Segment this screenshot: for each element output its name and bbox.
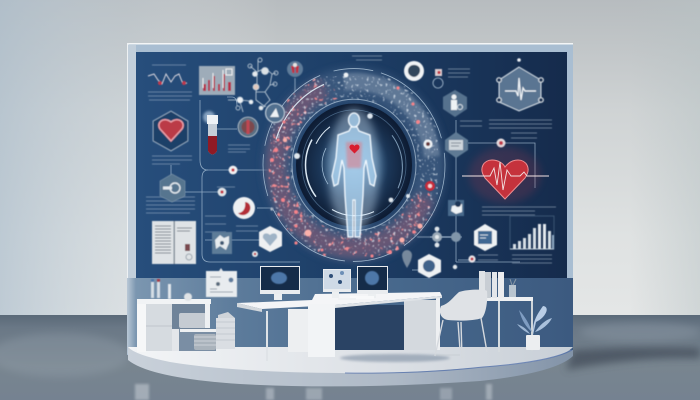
icon: heart shield bbox=[259, 226, 282, 252]
left storage cabinet bbox=[137, 299, 235, 352]
icon: blood test tube bbox=[203, 111, 218, 154]
icon: tool badge on ring bbox=[266, 104, 284, 122]
icon: specimen circle bbox=[238, 117, 258, 137]
connector lines bbox=[171, 97, 535, 270]
background wall bbox=[0, 0, 700, 316]
icon: small red node with ring bbox=[433, 69, 443, 88]
icon: heart hexagon bbox=[153, 111, 188, 151]
polished floor bbox=[0, 315, 700, 400]
display wall frame bbox=[127, 43, 573, 355]
icon: kidney badge bbox=[233, 197, 255, 219]
icon: heartbeat hexagon bbox=[497, 58, 543, 111]
circular platform bbox=[128, 347, 573, 386]
icon: red connector dots left bbox=[218, 166, 274, 257]
central ring: white nodes bbox=[294, 73, 435, 202]
floor reflection strips bbox=[135, 384, 492, 400]
potted plant bbox=[517, 306, 552, 350]
icon: report hexagon bbox=[474, 224, 497, 251]
icon: bar chart card bbox=[199, 66, 235, 95]
text placeholder lines: left column bbox=[146, 65, 258, 232]
icon: connector tile bbox=[448, 200, 464, 216]
text placeholder lines: right column bbox=[352, 56, 556, 263]
central ring: glowing red particles bbox=[270, 86, 423, 258]
icon: person shield bbox=[418, 254, 441, 278]
central ring: band bbox=[263, 69, 445, 261]
lab tubes and clock on cabinet bbox=[151, 279, 192, 301]
icon: dark head profile badge bbox=[404, 61, 424, 81]
poster on wall bbox=[206, 268, 237, 297]
icon: lower right nodes bbox=[402, 227, 476, 269]
human body figure with heart bbox=[328, 108, 380, 237]
icon: organ badge top bbox=[287, 61, 303, 92]
icon: red dot on connector bbox=[496, 138, 506, 148]
bar chart: ascending bars bbox=[510, 216, 554, 249]
icon: molecule network bbox=[228, 58, 278, 112]
icon: large red ECG heart bbox=[462, 147, 549, 203]
central white desk bbox=[237, 292, 442, 361]
white chair bbox=[435, 290, 487, 358]
icon: document booklet bbox=[152, 221, 196, 264]
icon: gear hexagon bbox=[160, 174, 185, 202]
icon: person hexagon bbox=[443, 90, 467, 117]
right side table and binders bbox=[479, 271, 533, 352]
icon: monitor hexagon bbox=[445, 132, 468, 158]
icon: puzzle tile bbox=[212, 232, 232, 254]
icon: pulse line chart bbox=[148, 74, 187, 85]
computer monitors bbox=[260, 266, 388, 300]
dark navy data board bbox=[136, 52, 567, 278]
